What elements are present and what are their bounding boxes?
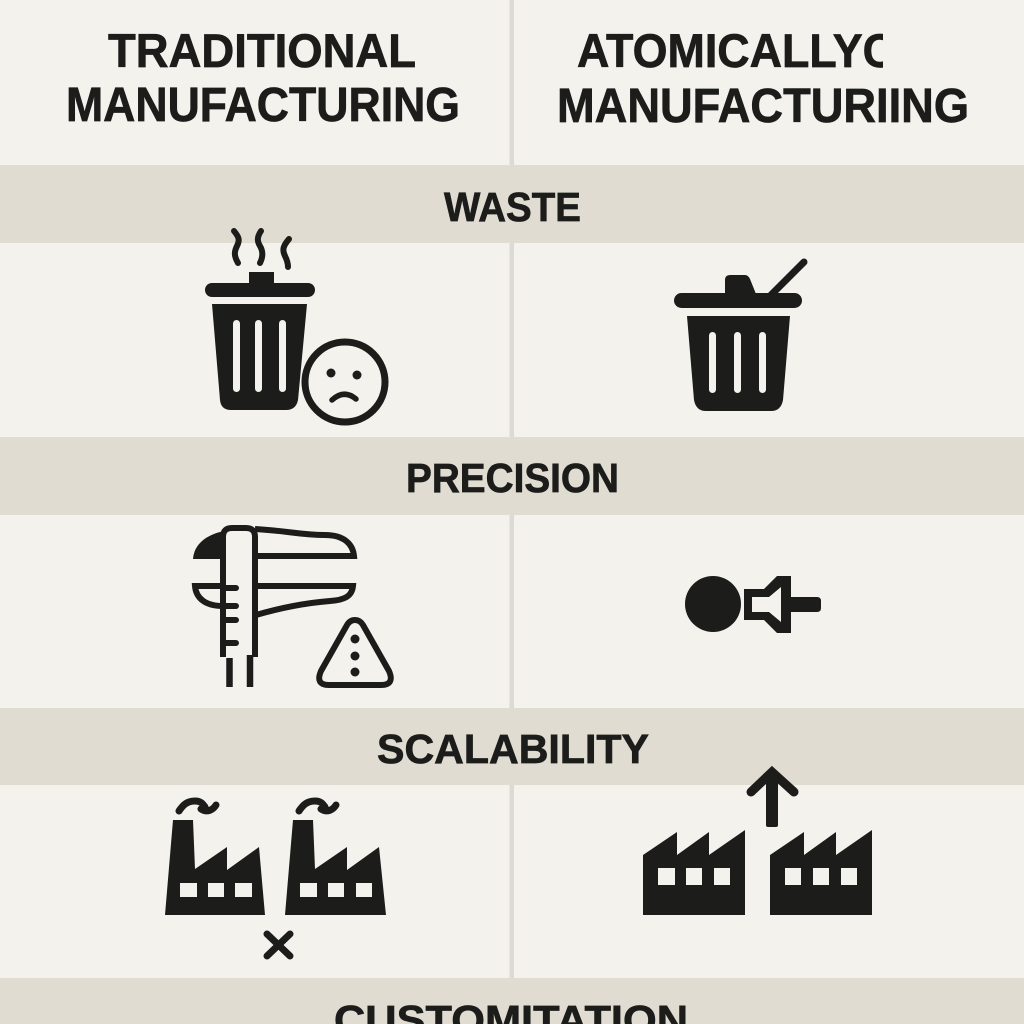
label: precision: PRECISION: [406, 455, 619, 501]
heading: atomically manufacturing: [560, 34, 967, 123]
heading: atomically manufacturing: MANUFACTURIING: [557, 80, 969, 133]
heading: atomically manufacturing: ATOMICALLYC: [577, 24, 895, 77]
icon: two polluting factories with cross: [165, 801, 386, 956]
band: precision: [0, 437, 1024, 515]
icon: clean trash can: [674, 262, 804, 411]
label: scalability: SCALABILITY: [377, 726, 649, 772]
icon: caliper with warning triangle: [193, 528, 391, 687]
icon: smelly trash can with sad face: [205, 231, 385, 422]
band: waste: [0, 165, 1024, 243]
icon: atom and precision tip: [685, 576, 821, 633]
label: waste: WASTE: [444, 184, 581, 230]
band: customitation: [0, 978, 1024, 1024]
band: scalability: [0, 708, 1024, 785]
heading: traditional manufacturing: MANUFACTURING: [66, 79, 460, 132]
icon: scaled factories with up arrow: [643, 772, 872, 915]
heading: traditional manufacturing: TRADITIONAL: [108, 24, 416, 77]
heading: traditional manufacturing: [66, 24, 460, 132]
